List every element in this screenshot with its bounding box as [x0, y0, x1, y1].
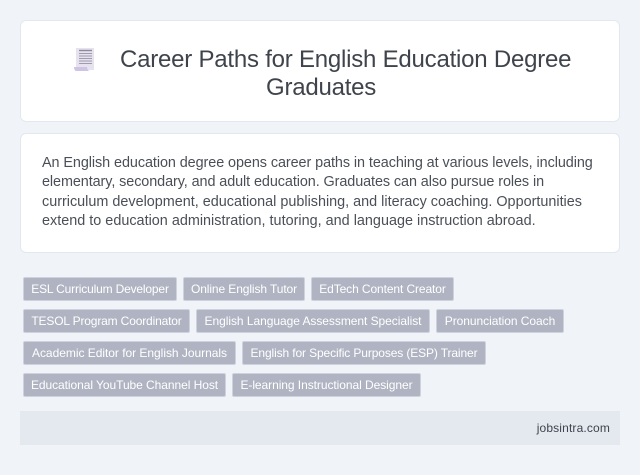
text block: description: extend to education administration, tutoring, and language instruction abroad. [42, 213, 536, 229]
tag: Online English Tutor [191, 282, 297, 296]
tag: English for Specific Purposes (ESP) Trainer [251, 346, 477, 360]
icon: document scroll [74, 48, 94, 71]
panel: career tags [23, 277, 564, 397]
tag [196, 309, 430, 333]
text block: description: curriculum development, educational publishing, and literacy coaching. Opportunities [42, 194, 582, 210]
tag [23, 309, 190, 333]
tag: ESL Curriculum Developer [31, 282, 169, 296]
tag [242, 341, 486, 365]
panel: description card [20, 133, 620, 253]
footer [20, 411, 620, 445]
tag: TESOL Program Coordinator [31, 314, 182, 328]
tag [23, 277, 177, 301]
title: Graduates [266, 74, 376, 101]
tag [232, 373, 421, 397]
tag: English Language Assessment Specialist [205, 314, 421, 328]
tag [23, 341, 236, 365]
text block: description: elementary, secondary, and adult education. Graduates can also pursue roles in [42, 174, 544, 190]
footer source text: jobsintra.com [537, 421, 610, 435]
tag: Pronunciation Coach [445, 314, 555, 328]
tag [311, 277, 454, 301]
tag [436, 309, 564, 333]
tag [23, 373, 226, 397]
tag [183, 277, 305, 301]
panel: title card [20, 20, 620, 122]
title [120, 46, 571, 101]
tag: E-learning Instructional Designer [240, 378, 413, 392]
tag: Educational YouTube Channel Host [31, 378, 218, 392]
text block: description [42, 155, 593, 229]
tag: EdTech Content Creator [319, 282, 446, 296]
title: Career Paths for English Education Degree [120, 46, 571, 73]
text block: description: An English education degree opens career paths in teaching at various levels, including [42, 155, 593, 171]
tag: Academic Editor for English Journals [32, 346, 227, 360]
